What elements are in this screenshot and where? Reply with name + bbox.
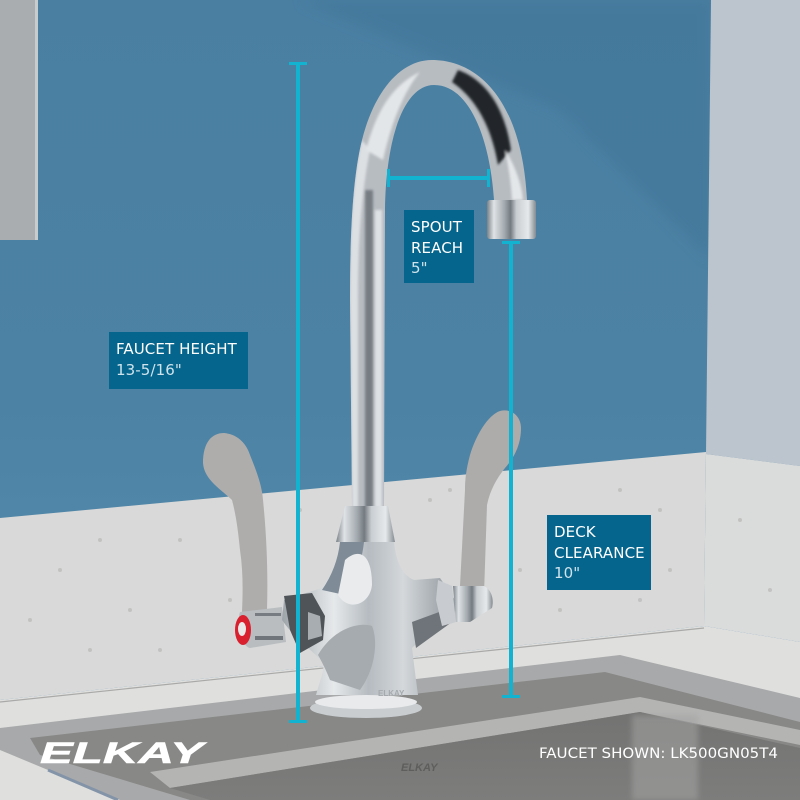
body bbox=[282, 542, 455, 695]
label: deck clearance: 10" bbox=[554, 564, 580, 582]
label: spout reach: 5" bbox=[411, 259, 428, 277]
sink embossed logo: ELKAY bbox=[401, 762, 439, 774]
label: spout reach: REACH bbox=[411, 238, 463, 256]
right arm underside bbox=[412, 608, 452, 648]
label: spout reach: SPOUT bbox=[411, 218, 462, 236]
sink basin bbox=[170, 712, 800, 800]
red hot indicator bbox=[235, 615, 251, 645]
label: faucet height: 13-5/16" bbox=[116, 360, 182, 378]
left handle bbox=[203, 433, 267, 612]
label: deck clearance bbox=[547, 515, 651, 590]
model caption: FAUCET SHOWN: LK500GN05T4 bbox=[539, 746, 778, 762]
right handle bbox=[460, 410, 521, 594]
sink rim bbox=[0, 655, 800, 800]
sink deck bbox=[30, 672, 800, 800]
sink bevel bbox=[150, 697, 800, 788]
Elkay logo: ELKAY bbox=[40, 737, 208, 770]
label: deck clearance: DECK bbox=[554, 523, 596, 541]
backsplash bbox=[0, 452, 706, 700]
label: deck clearance: CLEARANCE bbox=[554, 544, 645, 562]
base flange bbox=[310, 698, 422, 718]
label: faucet height bbox=[109, 332, 248, 389]
wall panel bbox=[0, 0, 38, 240]
body highlight bbox=[338, 554, 372, 605]
collar bbox=[336, 506, 395, 542]
right lever hub bbox=[453, 586, 493, 622]
dimension: deck clearance bbox=[502, 241, 520, 698]
right hex nut bbox=[436, 580, 456, 626]
spout bbox=[350, 60, 527, 506]
left hex nut bbox=[284, 593, 325, 653]
aerator bbox=[487, 200, 536, 239]
dimension: spout reach bbox=[387, 169, 490, 187]
embossed faucet logo: ELKAY bbox=[378, 689, 405, 698]
left lever hub bbox=[239, 607, 286, 648]
body shadow bbox=[322, 542, 364, 595]
counter bbox=[0, 626, 800, 800]
sink rim blue edge bbox=[48, 770, 118, 800]
label: faucet height: FAUCET HEIGHT bbox=[116, 340, 237, 358]
dimension: faucet height bbox=[289, 62, 307, 723]
body lower blob bbox=[318, 625, 375, 690]
side wall bbox=[706, 0, 800, 466]
label: spout reach bbox=[404, 210, 474, 283]
faucet bbox=[203, 50, 540, 718]
